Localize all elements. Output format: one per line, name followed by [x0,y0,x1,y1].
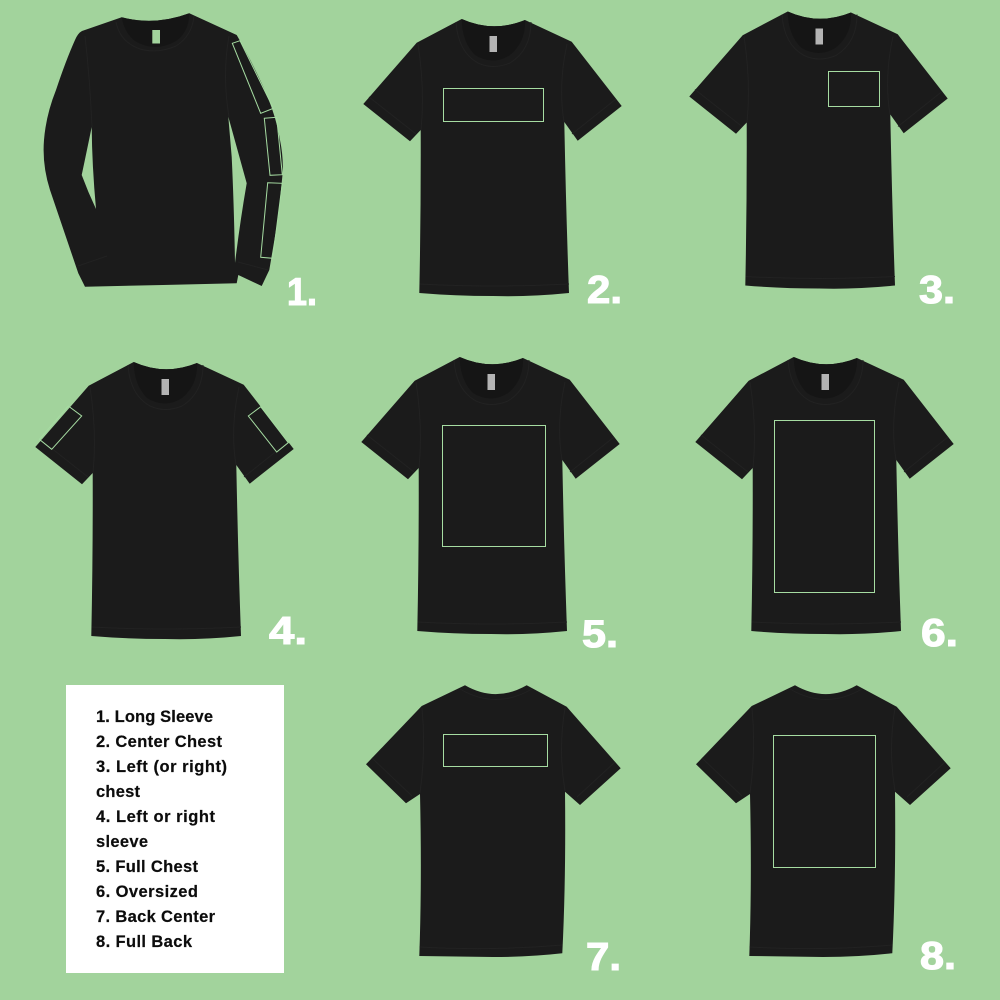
number 6: 6. [921,612,958,655]
print area: sleeve upper [232,41,273,113]
print area: sleeve lower [261,183,282,258]
garment: front tee [361,357,620,634]
panel 4: sleeves [35,362,307,653]
panel 5: full chest [361,357,620,656]
garment: front tee [363,19,622,296]
garment: front tee [689,12,948,289]
garment: front tee [695,357,954,634]
print area: left chest [828,72,880,106]
panel 2: center chest [363,19,622,312]
number 4: 4. [269,610,307,653]
legend text: 8. Full Back [96,933,193,951]
garment: back tee [366,685,621,957]
legend text: 3. Left (or right) [96,758,227,776]
legend text: 1. Long Sleeve [96,708,213,726]
number 5: 5. [582,613,618,656]
print area: full back [774,736,876,868]
legend text: 5. Full Chest [96,858,198,876]
print area: sleeve middle [264,117,282,175]
number 3: 3. [919,269,955,312]
print area: right-hand-side sleeve [39,406,82,449]
panel 8: full back [696,685,956,978]
panel 6: oversized [695,357,958,655]
legend text: 6. Oversized [96,883,198,901]
print area: full chest [442,426,546,546]
legend text: 2. Center Chest [96,733,222,751]
legend text: 4. Left or right [96,808,216,826]
panel 7: back center [366,685,621,979]
legend background [66,685,284,973]
legend panel [66,685,284,973]
garment: back tee [696,685,951,957]
legend text: sleeve [96,833,148,851]
panel 1: long sleeve shirt [44,13,317,314]
garment: front tee [35,362,294,639]
number 1: 1. [287,271,317,314]
garment: long sleeve tee [44,13,283,287]
print area: left-hand-side sleeve [248,407,288,452]
print area: oversized [774,420,874,592]
number 2: 2. [587,269,622,312]
number 7: 7. [586,936,621,979]
panel 3: left chest [689,12,955,312]
print area: center chest [444,88,544,122]
legend text [96,708,227,951]
number 8: 8. [920,935,956,978]
print area: back center [444,734,548,766]
legend text: chest [96,783,140,801]
legend text: 7. Back Center [96,908,216,926]
